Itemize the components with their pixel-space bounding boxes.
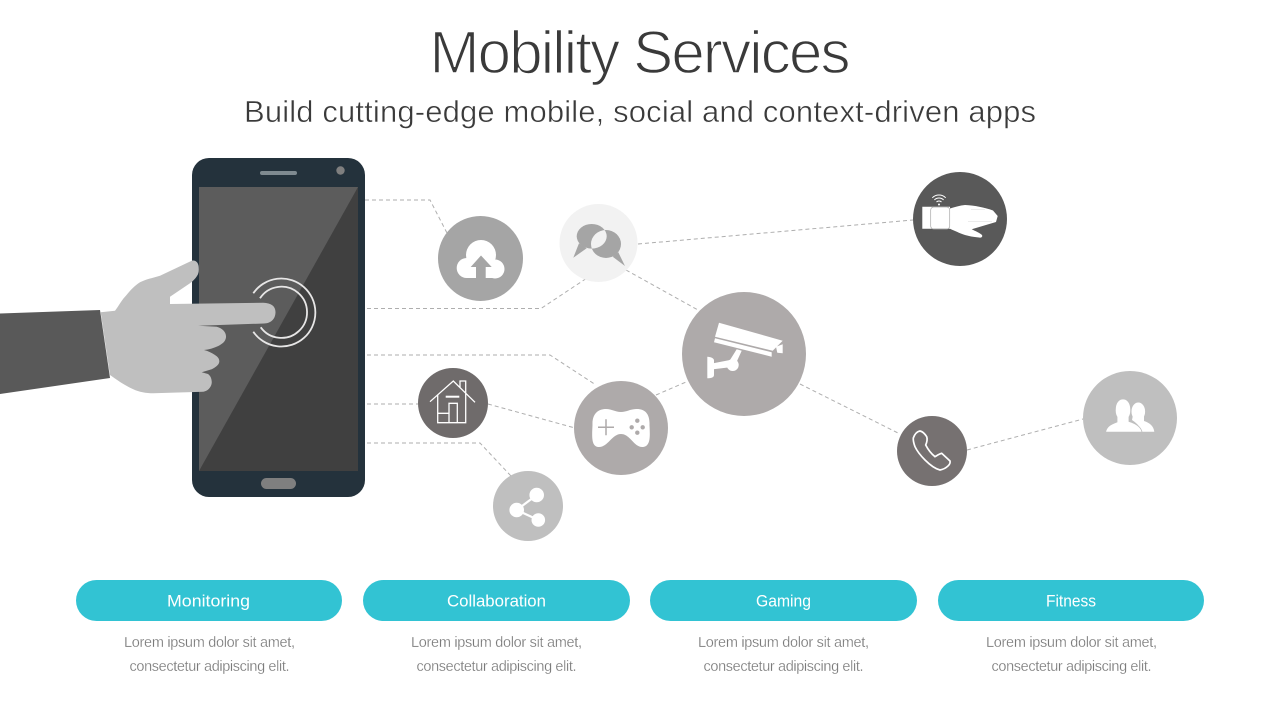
- icon: people: [1083, 371, 1177, 465]
- panel: fitness: Lorem ipsum dolor sit amet,: [986, 635, 1157, 651]
- touch rings: [253, 279, 315, 347]
- panel: fitness: consectetur adipiscing elit.: [992, 659, 1152, 675]
- smartphone: [192, 158, 365, 497]
- icon: cloud upload: [438, 216, 523, 301]
- panel: gaming: consectetur adipiscing elit.: [704, 659, 864, 675]
- dashed connector lines: [365, 200, 1083, 476]
- title: Mobility Services: [430, 19, 850, 86]
- panel: fitness: Fitness: [1046, 592, 1096, 610]
- icon: chat bubbles: [560, 204, 638, 282]
- panel: monitoring: [76, 580, 342, 675]
- panel: gaming: Gaming: [756, 592, 811, 610]
- panel: collaboration: Collaboration: [447, 592, 546, 610]
- panel: gaming: [650, 580, 917, 675]
- icon: smart home: [418, 368, 488, 438]
- icon: game controller: [574, 381, 668, 475]
- icon: telephone: [897, 416, 967, 486]
- panel: monitoring: Monitoring: [167, 592, 250, 610]
- panel: monitoring: consectetur adipiscing elit.: [130, 659, 290, 675]
- sleeve: [0, 310, 110, 394]
- icon: security camera: [682, 292, 806, 416]
- panel: collaboration: Lorem ipsum dolor sit amet,: [411, 635, 582, 651]
- panel: collaboration: consectetur adipiscing elit.: [416, 659, 576, 675]
- icon: share: [493, 471, 563, 541]
- panel: fitness: [938, 580, 1204, 675]
- icon: wearable wrist: [913, 172, 1007, 266]
- hand pointing: [101, 260, 276, 393]
- panel: monitoring: Lorem ipsum dolor sit amet,: [124, 635, 295, 651]
- subtitle: Build cutting-edge mobile, social and context-driven apps: [244, 94, 1036, 129]
- panel: collaboration: [363, 580, 630, 675]
- panel: gaming: Lorem ipsum dolor sit amet,: [698, 635, 869, 651]
